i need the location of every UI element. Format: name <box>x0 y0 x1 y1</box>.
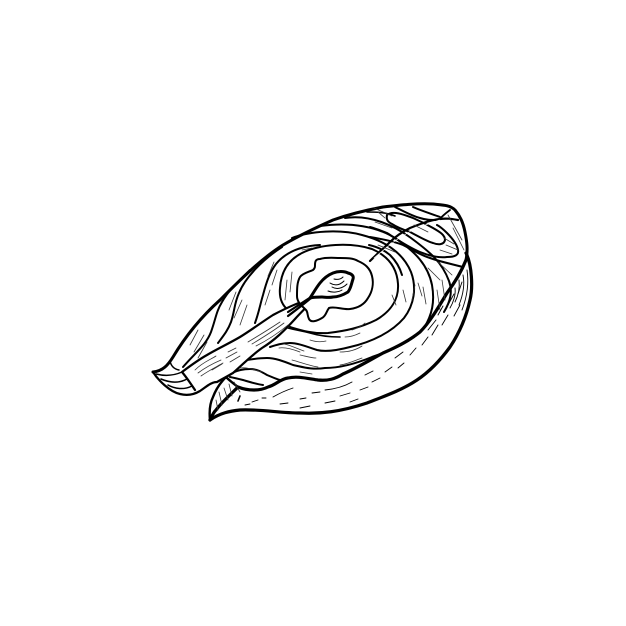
small skin mark <box>238 396 240 401</box>
left stripes <box>183 270 250 367</box>
fine hatching <box>190 208 464 410</box>
flesh contour lines <box>183 207 463 385</box>
ring 2 <box>270 231 414 351</box>
skin body outer top contour <box>153 204 467 372</box>
salmon steak <box>153 204 472 420</box>
lower left stripes <box>232 369 280 380</box>
rear tail fold <box>210 377 238 420</box>
ring 3 <box>247 225 433 369</box>
bottom skin contour <box>210 253 472 420</box>
upper right loops <box>387 213 445 244</box>
ring around the bone <box>280 245 398 333</box>
skin hatching <box>245 270 468 408</box>
ring 4 <box>345 217 451 312</box>
tail end lines <box>156 361 192 389</box>
front strip of flesh <box>153 297 316 395</box>
central cavity oval <box>310 272 353 298</box>
rib bone <box>370 219 458 261</box>
inner rim edge <box>210 260 466 420</box>
spine needle lines <box>288 297 311 316</box>
central vertebra bone shape <box>297 258 373 321</box>
rib fork <box>440 210 450 219</box>
cavity details <box>328 277 347 292</box>
